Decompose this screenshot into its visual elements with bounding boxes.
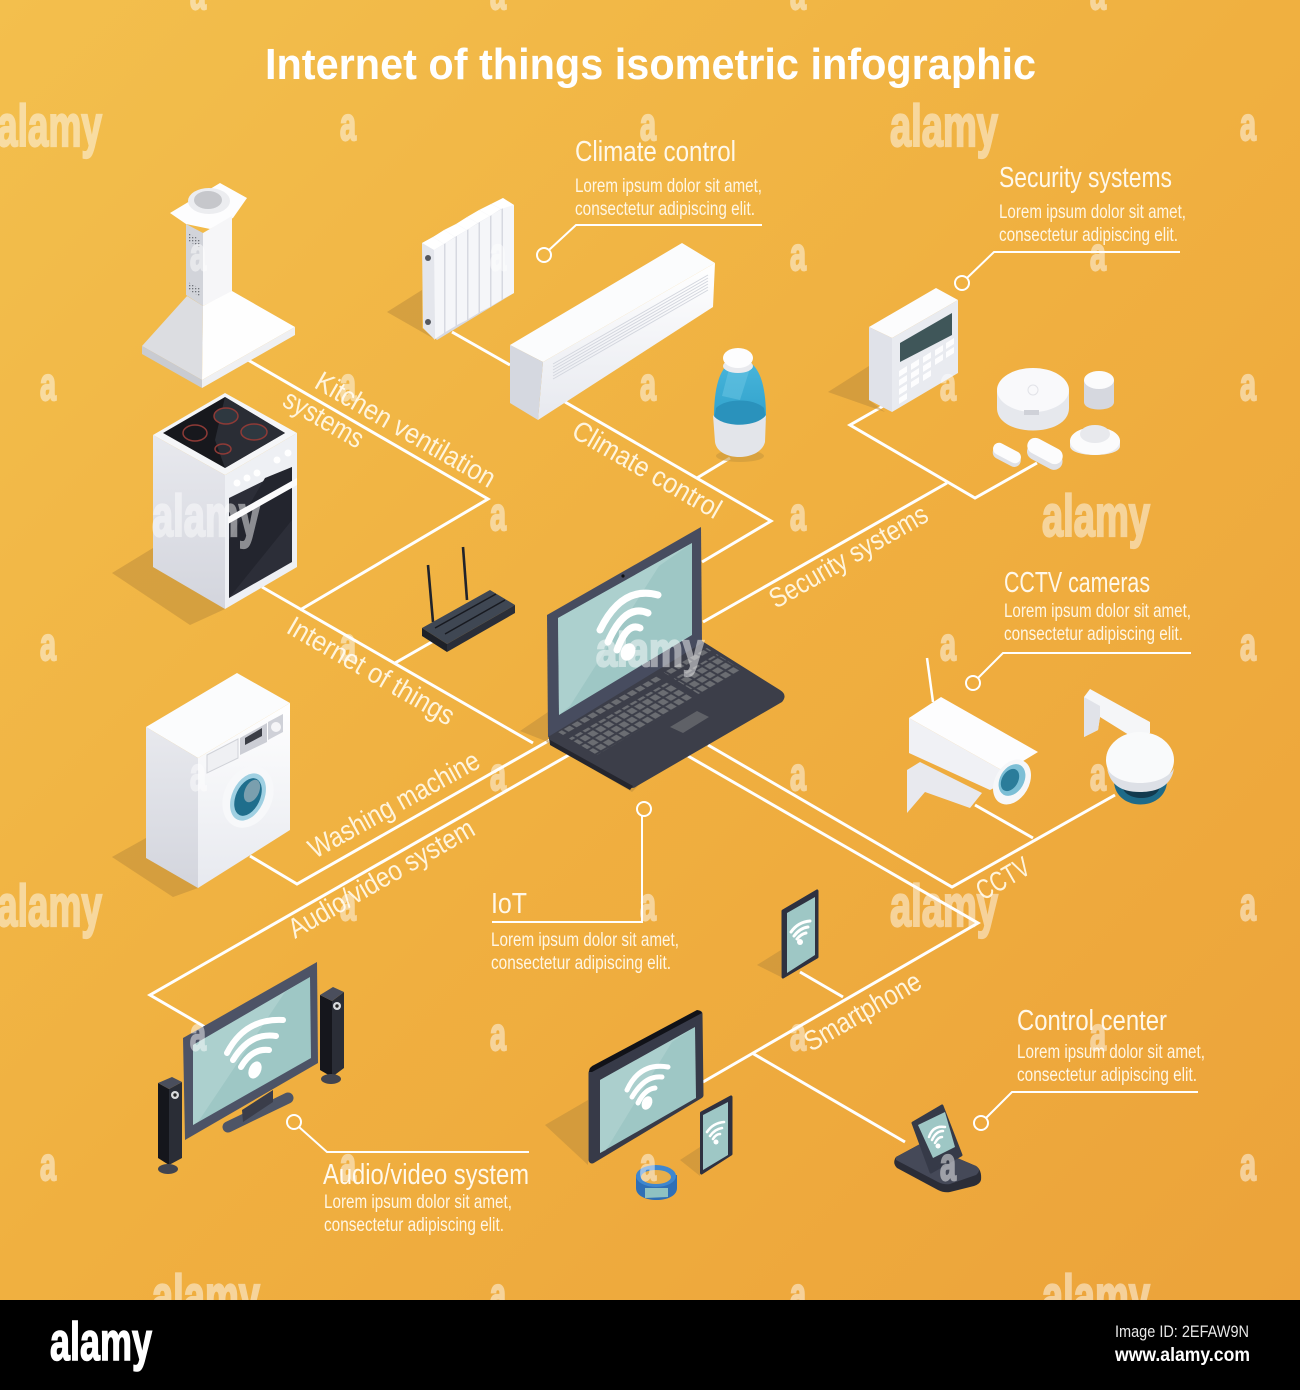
watermarks: a [490,1008,506,1060]
icon: television with speakers [158,962,344,1174]
watermarks: a [1240,1138,1256,1190]
callout: control center [974,1005,1205,1130]
watermarks: alamy [0,874,102,939]
icon: security sensors [990,368,1120,473]
icon: second phone [680,1097,731,1176]
watermarks: a [940,618,956,670]
icon: electric stove [112,393,297,625]
watermarks: a [1240,358,1256,410]
callout: iot: Lorem ipsum dolor sit amet, [491,930,679,951]
watermarks: alamy [890,94,998,159]
icon: cctv camera [907,658,1039,813]
label: cctv: CCTV [970,851,1036,906]
watermarks: a [490,1268,506,1320]
callout: climate control [537,136,762,262]
label: smartphone: Smartphone [798,965,927,1057]
watermarks: a [640,878,656,930]
label: audio video system: Audio/video system [282,812,480,944]
watermarks: alamy [890,874,998,939]
callout: security systems: Lorem ipsum dolor sit amet, [999,202,1186,223]
watermarks: a [1240,98,1256,150]
watermarks: alamy [152,484,260,549]
watermarks: a [190,748,206,800]
watermarks: alamy [152,1264,260,1329]
footer image id: Image ID: 2EFAW9N [1115,1322,1249,1341]
callout: audio video system: Audio/video system [323,1159,529,1191]
callout: audio video system: Lorem ipsum dolor sit amet, [324,1192,512,1213]
icon: security keypad [828,288,958,412]
callout: security systems: Security systems [999,162,1172,194]
watermarks: a [640,98,656,150]
connector lines [150,332,1115,1142]
callout: iot [491,802,679,974]
watermarks: a [1090,228,1106,280]
icon: washing machine [112,673,290,897]
watermarks: a [340,878,356,930]
watermarks: a [340,1138,356,1190]
watermarks: a [190,228,206,280]
callout: cctv cameras: CCTV cameras [1004,567,1150,599]
label: washing machine: Washing machine [303,745,485,864]
icon: humidifier [713,348,766,462]
watermarks: a [190,1008,206,1060]
label: kitchen ventilation: Kitchen ventilation [310,365,501,494]
watermarks: a [40,618,56,670]
callout: iot: IoT [491,888,527,920]
watermarks: a [940,358,956,410]
icon: cooker hood [142,183,295,388]
label: security systems: Security systems [764,498,933,614]
watermarks: a [1240,878,1256,930]
callout: climate control: Climate control [575,136,736,168]
icon: air conditioner [510,243,715,420]
icon: tablet [545,1010,702,1165]
label: internet of things: Internet of things [282,610,460,731]
title: Internet of things isometric infographic [265,40,1036,89]
callout: audio video system [287,1115,529,1236]
watermarks: alamy [1042,1264,1150,1329]
watermarks: a [1090,1008,1106,1060]
icon: dome camera [1084,689,1174,804]
icon: router [422,547,515,652]
footer band [0,1300,1300,1390]
icon: radiator [387,198,514,340]
watermarks: a [1090,748,1106,800]
watermarks: a [490,748,506,800]
watermarks: a [790,1268,806,1320]
watermarks: a [40,1138,56,1190]
label: systems: systems [278,383,370,454]
watermarks: a [340,358,356,410]
callout: security systems: consectetur adipiscing elit. [999,225,1178,246]
watermarks: a [490,228,506,280]
callout: cctv cameras: consectetur adipiscing elit. [1004,624,1183,645]
callout: audio video system: consectetur adipiscing elit. [324,1215,504,1236]
callout: climate control: consectetur adipiscing elit. [575,199,755,220]
icon: laptop [520,527,785,792]
callout: iot: consectetur adipiscing elit. [491,953,671,974]
callout: security systems [955,162,1186,290]
watermarks: alamy [0,94,102,159]
label: climate control: Climate control [567,414,727,525]
watermarks: alamy [1042,484,1150,549]
footer logo: alamy [50,1312,152,1372]
callout: control center: Control center [1017,1005,1167,1037]
icon: smart wristband [636,1165,677,1200]
watermarks: a [790,228,806,280]
watermarks: a [790,488,806,540]
watermarks: a [340,98,356,150]
callout: control center: Lorem ipsum dolor sit amet, [1017,1042,1205,1063]
callout: cctv cameras [966,567,1191,690]
callout: climate control: Lorem ipsum dolor sit amet, [575,176,762,197]
callout: cctv cameras: Lorem ipsum dolor sit amet, [1004,601,1191,622]
watermarks: a [340,618,356,670]
watermarks: alamy [596,623,704,676]
watermarks: a [40,358,56,410]
watermarks: a [640,358,656,410]
icon: control center dock [894,1106,981,1192]
watermarks: a [790,1008,806,1060]
watermarks: a [1240,618,1256,670]
watermarks: a [940,1138,956,1190]
icon: smartphone [757,891,817,977]
callout: control center: consectetur adipiscing elit. [1017,1065,1197,1086]
watermarks: a [640,1138,656,1190]
footer url: www.alamy.com [1114,1345,1250,1366]
watermarks: a [790,748,806,800]
watermarks: a [490,488,506,540]
